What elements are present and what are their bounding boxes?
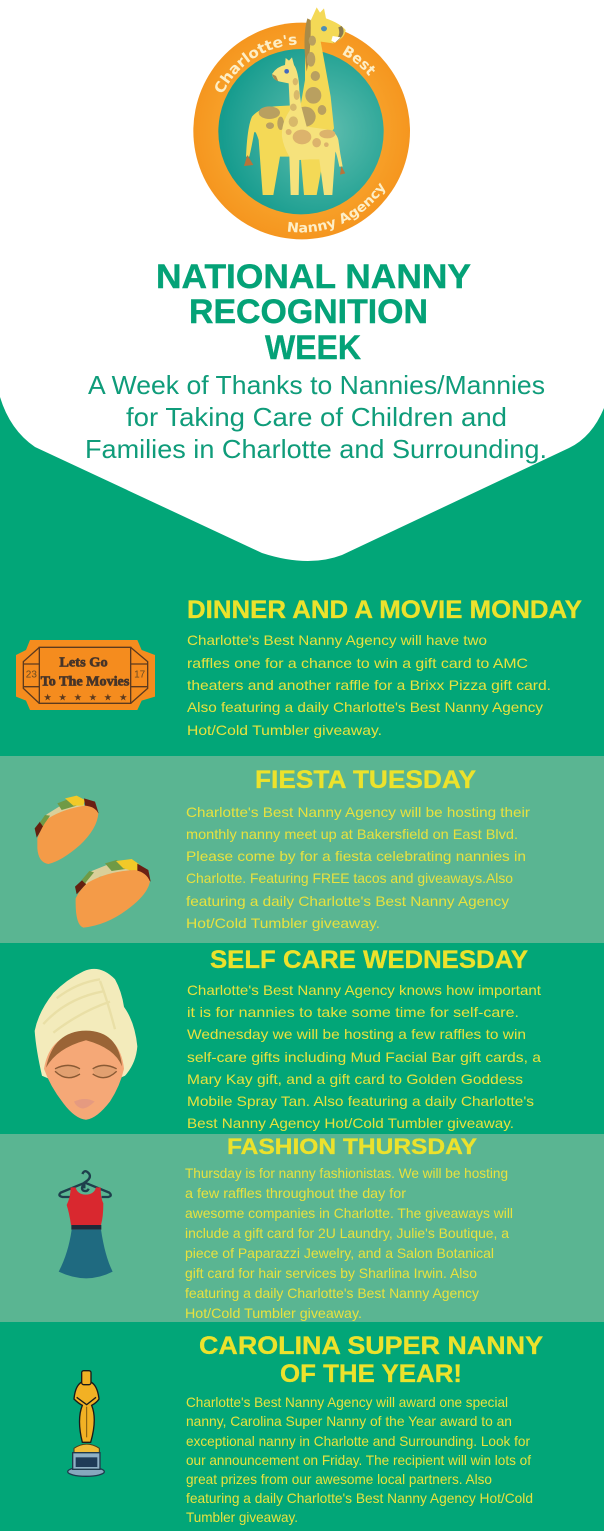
icon: movie ticket <box>16 640 155 710</box>
text: Wednesday: Best Nanny Agency Hot/Cold Tumbler giveaway. <box>187 1115 514 1131</box>
logo text: Charlotte's <box>215 35 297 92</box>
heading: Carolina Super Nanny <box>199 1332 543 1388</box>
icon: dress on hanger <box>59 1171 113 1278</box>
text: Thursday: Thursday is for nanny fashionistas. We will be hosting <box>185 1165 508 1181</box>
text: Carolina Super Nanny: nanny, Carolina Super Nanny of the Year award to an <box>186 1413 512 1429</box>
icon: award statuette <box>68 1371 104 1476</box>
text: Monday: Hot/Cold Tumbler giveaway. <box>187 722 382 738</box>
text: Tuesday: Charlotte. Featuring FREE tacos and giveaways.Also <box>186 870 513 886</box>
text: Tuesday: Please come by for a fiesta celebrating nannies in <box>186 848 526 864</box>
text: Tuesday: Hot/Cold Tumbler giveaway. <box>186 915 380 931</box>
subtitle: Families in Charlotte and Surrounding. <box>85 434 547 464</box>
text: Monday: Also featuring a daily Charlotte's Best Nanny Agency <box>187 699 543 715</box>
title: WEEK <box>265 329 361 367</box>
text: Wednesday: Mary Kay gift, and a gift card to Golden Goddess <box>187 1071 523 1087</box>
small giraffe <box>272 57 345 195</box>
text: Wednesday: Wednesday we will be hosting a few raffles to win <box>187 1026 526 1042</box>
logo: Charlotte's Best Nanny Agency <box>193 8 410 240</box>
text: Carolina Super Nanny: our announcement on Friday. The recipient will win lots of <box>186 1452 531 1468</box>
text: Thursday: awesome companies in Charlotte. The giveaways will <box>185 1205 513 1221</box>
text: Thursday: a few raffles throughout the day for <box>185 1185 406 1201</box>
subtitle <box>85 370 547 464</box>
text: Wednesday: Charlotte's Best Nanny Agency knows how important <box>187 982 541 998</box>
taco 2 <box>75 859 151 928</box>
text: Thursday: gift card for hair services by Sharlina Irwin. Also <box>185 1265 477 1281</box>
icon: face with towel <box>35 969 137 1120</box>
title: RECOGNITION <box>189 293 428 331</box>
text: Wednesday: Mobile Spray Tan. Also featuring a daily Charlotte's <box>187 1093 534 1109</box>
white header panel <box>0 0 604 561</box>
text: Thursday <box>185 1165 513 1321</box>
text: Carolina Super Nanny: exceptional nanny in Charlotte and Surrounding. Look for <box>186 1433 530 1449</box>
text: Thursday: include a gift card for 2U Laundry, Julie's Boutique, a <box>185 1225 509 1241</box>
icon: movie ticket: 23 <box>26 669 37 680</box>
text: Thursday: featuring a daily Charlotte's Best Nanny Agency <box>185 1285 479 1301</box>
big giraffe <box>244 7 346 195</box>
text: Wednesday: it is for nannies to take some time for self-care. <box>187 1004 519 1020</box>
subtitle: for Taking Care of Children and <box>126 402 507 432</box>
icon: movie ticket: 17 <box>134 669 146 680</box>
heading: Tuesday: FIESTA TUESDAY <box>255 766 476 794</box>
text: Thursday: piece of Paparazzi Jewelry, and a Salon Botanical <box>185 1245 494 1261</box>
heading: Thursday: FASHION THURSDAY <box>227 1134 477 1159</box>
text: Tuesday: Charlotte's Best Nanny Agency will be hosting their <box>186 804 530 820</box>
text: Carolina Super Nanny: featuring a daily Charlotte's Best Nanny Agency Hot/Cold <box>186 1490 533 1506</box>
text: Wednesday <box>187 982 541 1131</box>
text: Carolina Super Nanny <box>186 1394 533 1525</box>
logo text: Best <box>342 45 375 76</box>
text: Monday <box>187 632 551 738</box>
icon: movie ticket: To The Movies <box>41 673 129 688</box>
band: Tuesday <box>0 756 604 943</box>
text: Monday: Charlotte's Best Nanny Agency will have two <box>187 632 487 648</box>
subtitle: A Week of Thanks to Nannies/Mannies <box>88 370 545 400</box>
text: Carolina Super Nanny: Tumbler giveaway. <box>186 1509 298 1525</box>
heading: Monday: DINNER AND A MOVIE MONDAY <box>187 596 582 624</box>
heading: Wednesday: SELF CARE WEDNESDAY <box>210 946 528 974</box>
text: Tuesday: monthly nanny meet up at Bakersfield on East Blvd. <box>186 826 518 842</box>
text: Thursday: Hot/Cold Tumbler giveaway. <box>185 1305 362 1321</box>
text: Monday: raffles one for a chance to win a gift card to AMC <box>187 655 528 671</box>
logo text <box>215 35 386 233</box>
text: Wednesday: self-care gifts including Mud Facial Bar gift cards, a <box>187 1049 541 1065</box>
logo text: Nanny Agency <box>288 182 386 233</box>
title: NATIONAL NANNY <box>156 258 471 296</box>
text: Carolina Super Nanny: great prizes from our awesome local partners. Also <box>186 1471 492 1487</box>
taco 1 <box>35 796 99 864</box>
text: Monday: theaters and another raffle for a Brixx Pizza gift card. <box>187 677 551 693</box>
icon: movie ticket: Lets Go <box>59 656 108 671</box>
band: Thursday <box>0 1134 604 1322</box>
heading: Carolina Super Nanny: CAROLINA SUPER NANNY <box>199 1332 543 1360</box>
text: Tuesday: featuring a daily Charlotte's Best Nanny Agency <box>186 893 509 909</box>
text: Tuesday <box>186 804 530 931</box>
heading: Carolina Super Nanny: OF THE YEAR! <box>280 1360 462 1388</box>
title <box>156 258 471 367</box>
icon: movie ticket: ★★★★★★ <box>43 693 127 703</box>
text: Carolina Super Nanny: Charlotte's Best Nanny Agency will award one special <box>186 1394 508 1410</box>
icon: tacos <box>35 796 151 928</box>
